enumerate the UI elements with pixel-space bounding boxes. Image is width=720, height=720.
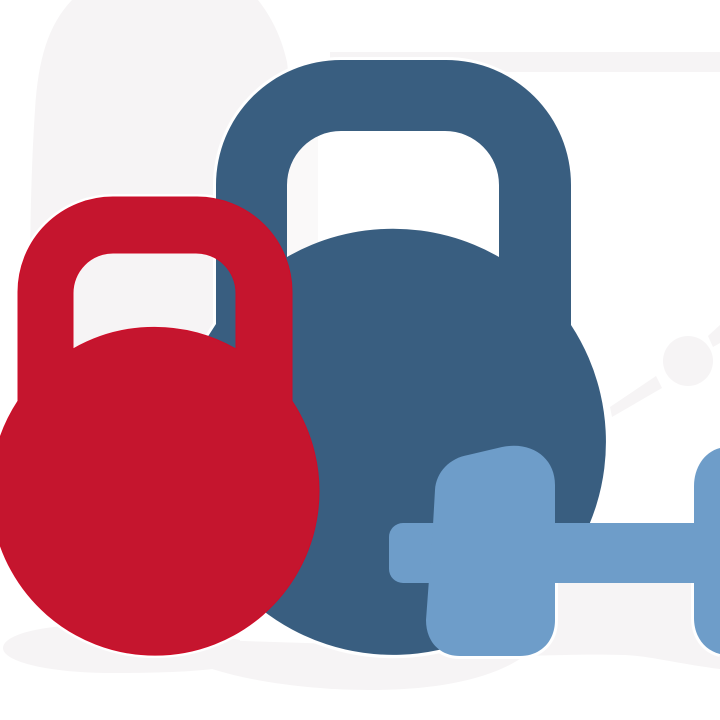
background frame side <box>287 120 318 262</box>
dumbbell left plate <box>426 446 555 656</box>
background rounded blob <box>30 0 290 360</box>
floor shadow centre <box>212 640 532 690</box>
blue kettlebell <box>180 60 606 655</box>
background node and connector <box>610 325 720 417</box>
dumbbell bar <box>389 523 720 583</box>
dumbbell <box>389 446 720 656</box>
floor shadow right <box>520 583 720 669</box>
background frame top bar <box>330 52 720 72</box>
red kettlebell <box>0 197 319 655</box>
floor shadow left <box>3 625 240 673</box>
dumbbell right plate <box>694 448 720 654</box>
